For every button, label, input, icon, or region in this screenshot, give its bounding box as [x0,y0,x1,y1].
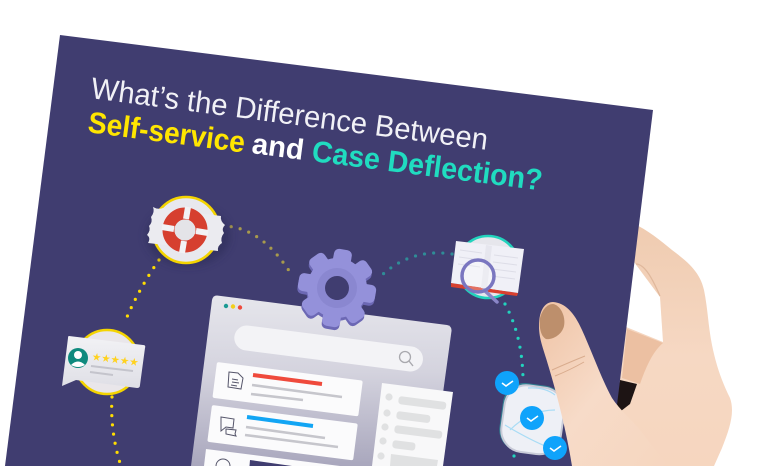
result card 3 [204,449,340,466]
side list panel [372,383,453,466]
result card 2 [207,405,358,460]
title line 1: What’s the Difference Between [89,72,490,157]
title [86,72,544,197]
icon: life ring ticket [146,197,230,266]
dotted path: yellow [112,226,293,463]
result card 1 [212,362,363,416]
hand: thumb [539,302,668,466]
title: Case Deflection: Case Deflection? [310,135,544,197]
check badge middle [520,406,544,430]
hand: fingers behind paper [570,222,732,466]
dotted path: teal [382,253,523,463]
check badge top [495,371,519,395]
icon: gear [291,243,382,336]
panel: dark purple paper [5,35,653,466]
icon: linked chain with check badges [495,371,567,457]
icon: review bubble [62,330,145,394]
search bar [233,324,424,373]
title: Self-service: Self-service [86,106,247,160]
rating stars: ★★★★★ [91,351,139,369]
window dots [224,304,242,310]
check badge bottom [543,436,567,460]
panel: browser window [191,296,453,466]
icon: book and magnifier [451,236,524,302]
title: and: and [250,128,306,167]
